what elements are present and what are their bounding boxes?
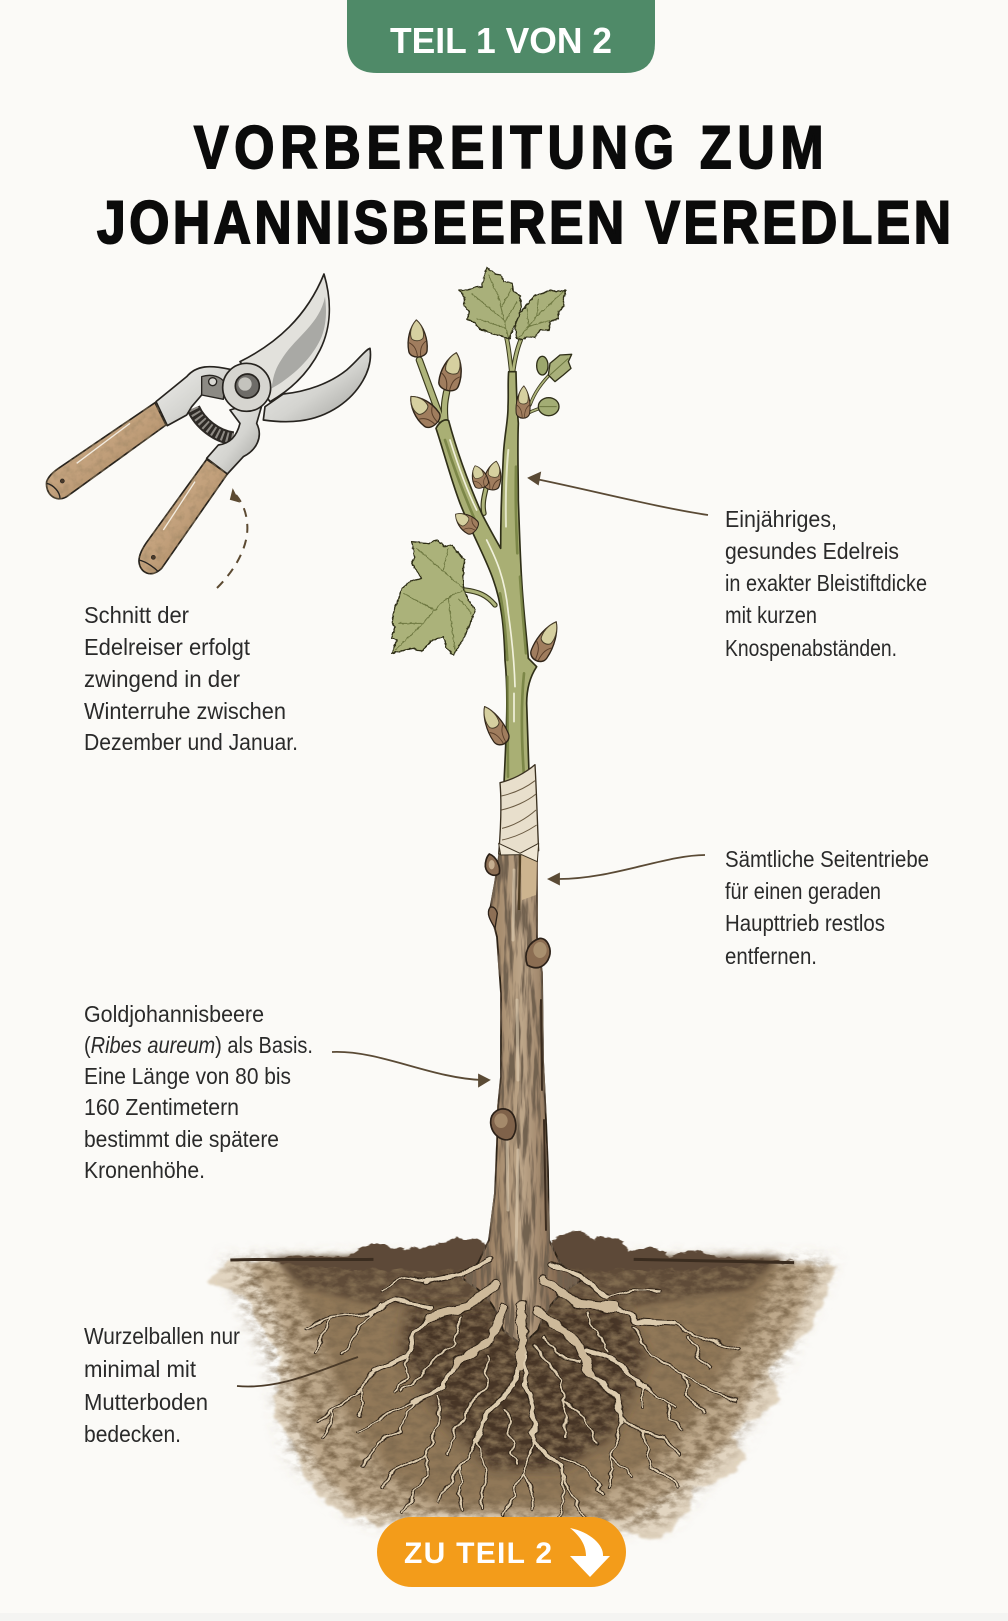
text: rootstock: 160 Zentimetern bbox=[84, 1094, 239, 1120]
knob upper right bbox=[526, 938, 550, 968]
button: Zu Teil 2: ZU TEIL 2 bbox=[404, 1537, 552, 1570]
illustration: pruning shears bbox=[46, 274, 370, 574]
text: cutting time: Edelreiser erfolgt bbox=[84, 634, 251, 660]
text: scion quality: in exakter Bleistiftdicke bbox=[725, 570, 927, 596]
leader line: scion bbox=[529, 473, 708, 515]
title: VORBEREITUNG ZUM bbox=[194, 113, 824, 181]
text: scion quality: mit kurzen bbox=[725, 602, 817, 628]
text: scion quality bbox=[725, 506, 927, 661]
text: side shoots bbox=[725, 846, 929, 969]
text: rootstock: Kronenhöhe. bbox=[84, 1157, 205, 1183]
leaf top left bbox=[459, 267, 521, 338]
lower blade bbox=[263, 348, 370, 422]
thin twigs and petioles bbox=[419, 338, 548, 605]
text: rootstock: Goldjohannisbeere bbox=[84, 1001, 264, 1027]
text: cutting time: Winterruhe zwischen bbox=[84, 698, 286, 724]
illustration: rootstock trunk bbox=[462, 850, 582, 1345]
leader line: side shoots bbox=[549, 855, 705, 884]
text: rootstock: bestimmt die spätere bbox=[84, 1126, 279, 1152]
large side leaf bbox=[392, 540, 475, 655]
text: side shoots: Haupttrieb restlos bbox=[725, 910, 885, 936]
soil pale wash bbox=[209, 1260, 837, 1538]
small bud and stub bbox=[485, 854, 500, 928]
text: scion quality: Knospenabständen. bbox=[725, 635, 897, 661]
upper handle metal bbox=[156, 367, 230, 426]
spring bbox=[193, 408, 233, 438]
graft cut sliver bbox=[521, 855, 537, 900]
soil mid wash bbox=[248, 1263, 816, 1520]
text: root ball: bedecken. bbox=[84, 1421, 181, 1447]
leaf top right bbox=[515, 290, 566, 340]
text: cutting time: Schnitt der bbox=[84, 602, 189, 628]
dashed arrow: shears callout bbox=[217, 491, 247, 588]
bark texture bbox=[507, 870, 546, 1260]
soil inner wash bbox=[282, 1260, 781, 1507]
text: rootstock: Eine Länge von 80 bis bbox=[84, 1063, 291, 1089]
soil dark centre bbox=[399, 1307, 647, 1470]
illustration: soil bbox=[209, 1232, 837, 1538]
graft wrap bbox=[499, 765, 539, 862]
knob lower left bbox=[491, 1109, 516, 1140]
text: scion quality: gesundes Edelreis bbox=[725, 538, 899, 564]
lower handle metal bbox=[207, 400, 263, 474]
title: JOHANNISBEEREN VEREDLEN bbox=[97, 188, 951, 256]
leader line: root ball bbox=[237, 1357, 358, 1387]
text: root ball bbox=[84, 1323, 240, 1447]
illustration: roots bbox=[306, 1260, 738, 1517]
buds bbox=[403, 320, 564, 748]
button: Zu Teil 2 bbox=[377, 1517, 626, 1587]
text: root ball: Wurzelballen nur bbox=[84, 1323, 240, 1349]
text: side shoots: entfernen. bbox=[725, 943, 817, 969]
text: cutting time: Dezember und Januar. bbox=[84, 729, 298, 755]
leader line: rootstock bbox=[332, 1052, 489, 1086]
text: side shoots: für einen geraden bbox=[725, 878, 881, 904]
title bbox=[97, 113, 951, 256]
illustration: scion shoot bbox=[392, 267, 572, 783]
part tab: Teil 1 von 2: TEIL 1 VON 2 bbox=[390, 20, 612, 61]
text: rootstock: (Ribes aureum) als Basis. bbox=[84, 1032, 313, 1058]
wooden handle two bbox=[139, 459, 227, 574]
upper blade bbox=[240, 274, 329, 402]
text: root ball: Mutterboden bbox=[84, 1389, 208, 1415]
main stem bbox=[436, 372, 537, 783]
soil dark upper band bbox=[274, 1257, 781, 1313]
text: cutting time bbox=[84, 602, 298, 755]
small leaf and green buds bbox=[537, 354, 572, 416]
icon: curved down arrow bbox=[570, 1528, 610, 1577]
text: root ball: minimal mit bbox=[84, 1356, 197, 1382]
part tab: Teil 1 von 2 bbox=[347, 0, 655, 73]
text: scion quality: Einjähriges, bbox=[725, 506, 837, 532]
wooden handle one bbox=[46, 403, 166, 499]
surface clods bbox=[256, 1232, 794, 1271]
text: rootstock bbox=[84, 1001, 313, 1183]
text: cutting time: zwingend in der bbox=[84, 666, 240, 692]
stem highlights bbox=[445, 440, 526, 777]
text: side shoots: Sämtliche Seitentriebe bbox=[725, 846, 929, 872]
soil mottling bbox=[226, 1260, 829, 1527]
pivot disc bbox=[223, 363, 271, 411]
